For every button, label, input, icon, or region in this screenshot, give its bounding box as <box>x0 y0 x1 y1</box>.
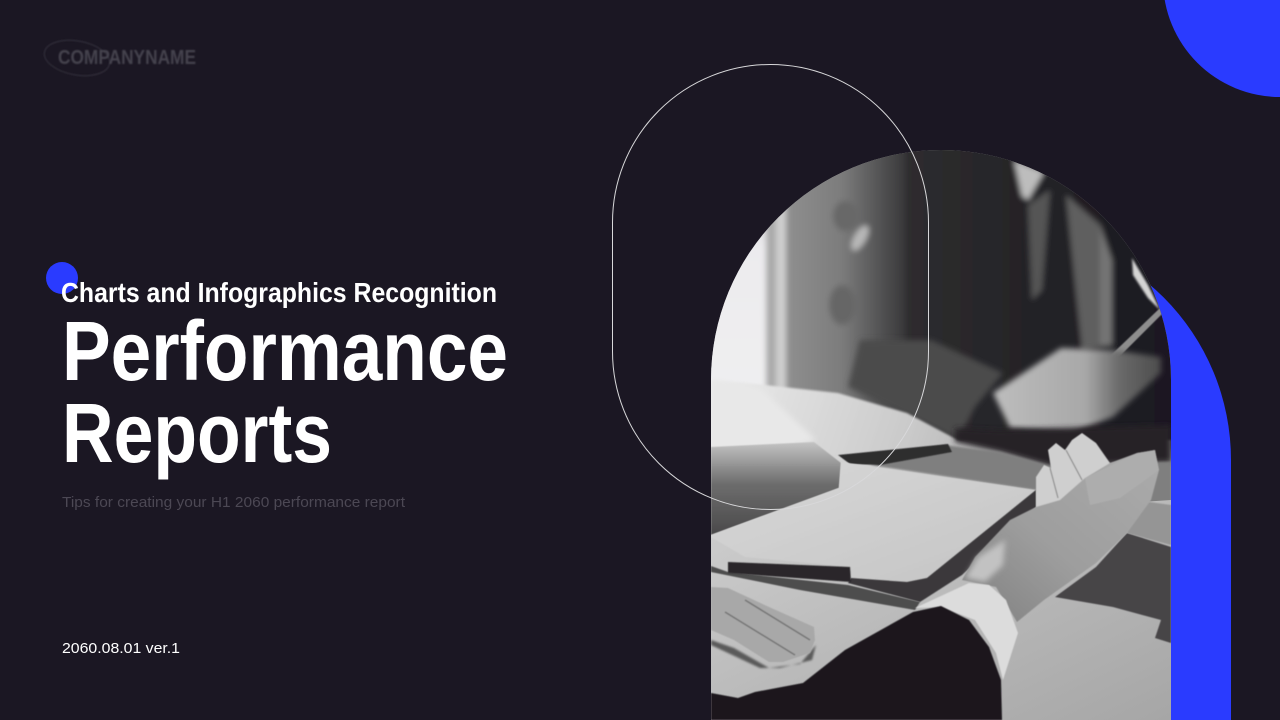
jacket sleeve <box>711 606 1002 720</box>
fingers <box>1036 433 1110 507</box>
phone <box>1113 308 1162 355</box>
folder strip <box>711 566 920 610</box>
photo background: window, chair and seated person <box>700 140 1190 450</box>
right dark folder <box>1055 533 1171 643</box>
logo: company name <box>42 36 196 80</box>
finger gaps <box>1050 450 1082 498</box>
blue corner circle <box>1163 0 1280 97</box>
main title <box>62 304 508 480</box>
dark pen on table <box>838 444 952 465</box>
title line 1: Performance <box>62 304 508 398</box>
subtitle: Charts and Infographics Recognition <box>61 277 497 308</box>
folder edge <box>848 490 1036 602</box>
seated person's sleeve <box>848 340 1003 440</box>
blue arch behind photo <box>771 230 1231 720</box>
near table surface <box>711 500 1171 720</box>
back of fingers <box>711 587 815 662</box>
palm and wrist <box>962 450 1159 622</box>
logo ellipse <box>42 36 112 80</box>
finger gaps <box>725 600 810 655</box>
table area far <box>711 384 1171 530</box>
seated person's hand <box>993 348 1161 433</box>
dark band behind hand <box>955 425 1171 466</box>
shirt cuff <box>915 583 1018 680</box>
dark notebook <box>711 442 841 535</box>
black pen <box>728 562 851 582</box>
blue accent dot <box>46 262 78 294</box>
document <box>711 462 1036 582</box>
left hand shadow <box>711 640 816 668</box>
right table patch <box>1127 500 1171 545</box>
thin outlined pill <box>612 64 928 510</box>
left hand on desk <box>711 587 815 662</box>
thumb <box>1085 450 1159 505</box>
tagline: Tips for creating your H1 2060 performance report <box>62 494 406 511</box>
logo text: COMPANYNAME <box>58 47 196 69</box>
white notebook <box>766 410 812 444</box>
wrist highlight <box>965 540 1005 582</box>
title line 2: Reports <box>62 386 332 480</box>
bright shoulder sliver <box>1132 258 1160 310</box>
date and version: 2060.08.01 ver.1 <box>62 640 180 657</box>
far table surface <box>870 444 1171 501</box>
outstretched hand <box>962 433 1159 622</box>
photo: business meeting at a desk <box>700 140 1190 720</box>
